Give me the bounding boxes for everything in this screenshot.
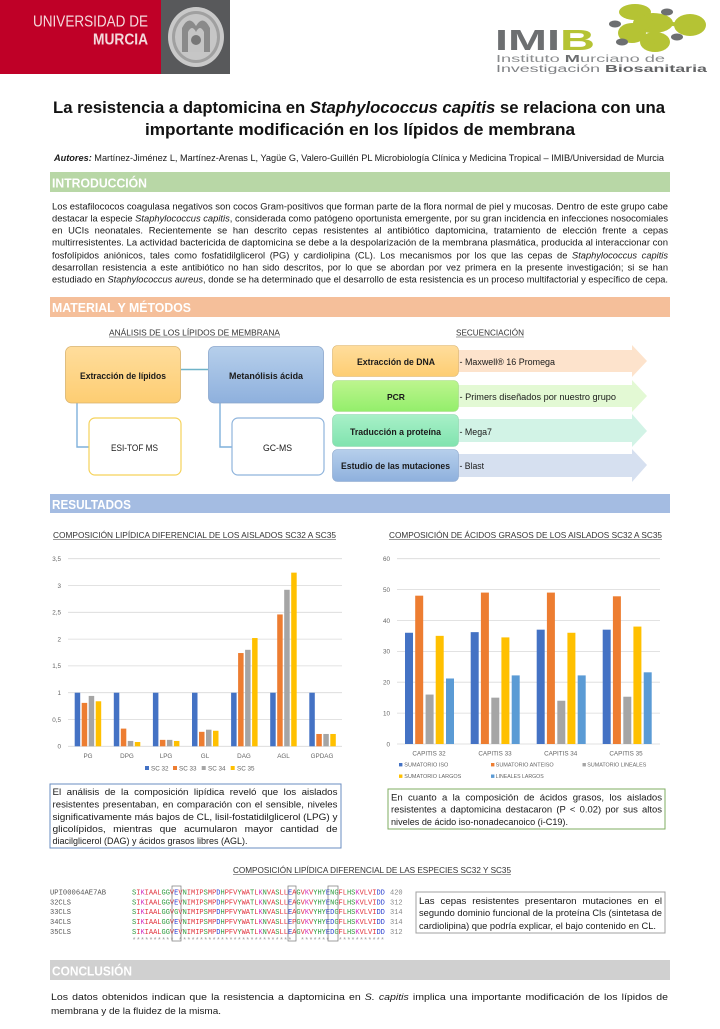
legend: SUMATORIO ISO — [404, 763, 448, 769]
heading: composición de ácidos grasos: COMPOSICIÓN DE ÁCIDOS GRASOS DE LOS AISLADOS SC32 A SC35 — [389, 530, 662, 540]
bar chart: composición de ácidos grasos: 60 — [383, 556, 390, 563]
bar chart: composición lipídica: PG — [83, 753, 93, 760]
callout: composición de ácidos grasos: niveles de ácido iso-nonadecanoico (i-C19). — [391, 817, 568, 827]
bar chart: composición lipídica: 0,5 — [52, 717, 61, 724]
sequence alignment: 312 — [390, 929, 403, 937]
callout: composición de ácidos grasos: En cuanto a la composición de ácidos grasos, los aislados — [391, 792, 663, 802]
step: extracción de DNA: Extracción de DNA — [357, 357, 435, 367]
text block: introducción: multirresistentes. La actividad bactericida de daptomicina se debe a la despolarización de la membrana plasmática, producida al interaccionar con — [52, 238, 668, 248]
bar chart: composición de ácidos grasos — [383, 556, 660, 780]
sequence alignment: 314 — [390, 909, 403, 917]
legend: SC 33 — [179, 765, 197, 772]
legend — [145, 765, 255, 772]
bar chart: composición lipídica: 0 — [57, 744, 61, 751]
callout: composición de ácidos grasos — [388, 789, 665, 829]
title — [53, 98, 666, 139]
text block: introducción: destacar la especie Staphylococcus capitis , considerada como patógeno oportunista emergente, por su gran incidencia en infecciones nosocomiales — [52, 214, 669, 224]
text block: conclusión: Los datos obtenidos indican que la resistencia a daptomicina en S. capitis implica una importante modificación de los lípidos de — [51, 992, 668, 1002]
bar chart: composición de ácidos grasos: CAPITIS 34 — [544, 750, 578, 758]
bar chart: composición lipídica: 3,5 — [52, 556, 61, 563]
sequence alignment: SIKIAALGGVEVNIMIPSMPDHPFVYWATLKNVASLLEPGVKVYHYEDGFLHSKVLVIDD — [132, 919, 385, 927]
legend: SUMATORIO LINEALES — [587, 763, 647, 769]
bar chart: composición lipídica: GPDAG — [311, 753, 333, 760]
callout: análisis de la composición lipídica: resistentes presentaban, en comparación con el sensible, niveles — [52, 800, 338, 810]
logo: IMIB: B — [560, 25, 595, 57]
text block: introducción — [52, 202, 669, 284]
title: La resistencia a daptomicina en Staphylococcus capitis se relaciona con una — [53, 98, 666, 117]
diagram: análisis de los lípidos de membrana: ANÁLISIS DE LOS LÍPIDOS DE MEMBRANA — [109, 328, 280, 338]
section heading: conclusión: CONCLUSIÓN — [52, 964, 132, 978]
bar chart: composición de ácidos grasos: 0 — [386, 741, 390, 748]
sequence alignment: 33CLS — [50, 909, 71, 917]
sequence alignment: 314 — [390, 919, 403, 927]
sequence alignment: 312 — [390, 900, 403, 908]
legend: SC 35 — [237, 765, 255, 772]
bar chart: composición de ácidos grasos: CAPITIS 32 — [412, 750, 446, 758]
callout: análisis de la composición lipídica: diacilglicerol (DAG) y ácidos grasos libres (AGL). — [52, 836, 248, 846]
callout: mutaciones: Las cepas resistentes presentaron mutaciones en el — [419, 896, 662, 906]
sequence alignment — [50, 886, 403, 946]
heading: composición lipídica de las especies: COMPOSICIÓN LIPÍDICA DIFERENCIAL DE LAS ESPECIES SC32 Y SC35 — [233, 865, 511, 875]
step: PCR: - Primers diseñados por nuestro grupo — [460, 392, 616, 402]
text block: conclusión — [51, 992, 668, 1016]
logo: IMIB — [495, 4, 708, 75]
sequence alignment: SIKIAALGGVEVNIMIPSMPDHPFVYWATLKNVASLLEAGVKVYHYENGFLHSKVLVIDD — [132, 900, 385, 908]
bar chart: composición lipídica: LPG — [160, 753, 172, 760]
bar chart: composición de ácidos grasos: 20 — [383, 680, 390, 686]
sequence alignment: SIKIAALGGVEVNIMIPSMPDHPFVYWATLKNVASLLEAGVKVYHYEDGFLHSKVLVIDD — [132, 929, 385, 937]
step: PCR: PCR — [387, 392, 405, 402]
logo: Universidad de Murcia: MURCIA — [93, 32, 148, 48]
bar chart: composición lipídica: 2,5 — [52, 610, 61, 617]
bar chart: composición lipídica: 3 — [57, 583, 61, 590]
callout: mutaciones — [416, 892, 665, 933]
bar chart: composición de ácidos grasos: CAPITIS 33 — [478, 750, 512, 758]
heading: composición lipídica: COMPOSICIÓN LIPÍDICA DIFERENCIAL DE LOS AISLADOS SC32 A SC35 — [53, 530, 336, 540]
bar chart: composición lipídica: DAG — [237, 753, 251, 760]
logo: IMIB: Investigación Biosanitaria — [496, 64, 708, 75]
step: traducción a proteína — [332, 414, 647, 447]
step: estudio de las mutaciones: - Blast — [460, 461, 484, 471]
callout: análisis de la composición lipídica: glicolípidos, mientras que acumularon mayor cantidad de — [52, 824, 338, 834]
text block: introducción: en UCIs neonatales. Recientemente se han descrito cepas resistentes al antibiótico daptomicina, tratamiento de elección frente a cepas — [52, 226, 669, 236]
step: extracción de DNA — [332, 345, 647, 377]
diagram: análisis de los lípidos de membrana: GC-MS — [263, 443, 292, 453]
section heading: conclusión — [50, 960, 670, 980]
diagram: análisis de los lípidos de membrana: ESI-TOF MS — [111, 443, 158, 453]
legend: SC 32 — [151, 765, 169, 772]
step: estudio de las mutaciones — [332, 449, 647, 482]
sequence alignment: 34CLS — [50, 919, 71, 927]
diagram: análisis de los lípidos de membrana: Metanólisis ácida — [229, 371, 304, 381]
callout: composición de ácidos grasos: resistentes a daptomicina destacaron (P < 0.02) por sus altos — [391, 804, 663, 814]
bar chart: composición lipídica: 1,5 — [52, 663, 61, 670]
bar chart: composición lipídica — [52, 556, 342, 772]
bar chart: composición de ácidos grasos: 50 — [383, 587, 390, 594]
logo: Universidad de Murcia — [0, 0, 230, 74]
diagram: secuenciación: SECUENCIACIÓN — [456, 328, 524, 338]
sequence alignment: UPI00064AE7AB — [50, 890, 106, 898]
legend — [399, 763, 647, 780]
bar chart: composición lipídica: GL — [201, 753, 210, 760]
logo: IMIB: IMI — [495, 25, 560, 57]
section heading: introducción — [50, 172, 670, 192]
bar chart: composición de ácidos grasos: 10 — [383, 710, 390, 717]
bar chart: composición lipídica: 2 — [57, 636, 61, 643]
legend: SUMATORIO ANTEISO — [496, 763, 554, 769]
text block: introducción: fosfolípidos aniónicos, tales como fosfatidilglicerol (PG) y cardiolipina (CL). Los mecanismos por los que las cepas de Staphylococcus capitis — [52, 250, 669, 260]
section heading: resultados — [50, 494, 670, 513]
callout: análisis de la composición lipídica: El análisis de la composición lipídica reveló que los aislados — [52, 787, 338, 797]
diagram: análisis de los lípidos de membrana: Extracción de lípidos — [80, 371, 166, 381]
title: importante modificación en los lípidos de membrana — [145, 120, 576, 139]
callout: análisis de la composición lipídica: significativamente más bajos de CL, lisil-fostatidilglicerol (LPG) y — [52, 812, 338, 822]
step: traducción a proteína: - Mega7 — [460, 427, 492, 437]
text block: introducción: Los estafilococos coagulasa negativos son cocos Gram-positivos que forman parte de la flora normal de piel y mucosas. Dentro de este grupo cabe — [52, 202, 668, 212]
sequence alignment: ********** *************************** ******* *********** — [132, 938, 385, 946]
sequence alignment: 35CLS — [50, 929, 71, 937]
sequence alignment: 32CLS — [50, 900, 71, 908]
logo: Universidad de Murcia: UNIVERSIDAD DE — [33, 14, 148, 30]
bar chart: composición lipídica: AGL — [277, 753, 290, 760]
callout: mutaciones: segundo dominio funcional de la proteína Cls (sintetasa de — [419, 908, 662, 918]
diagram: análisis de los lípidos de membrana — [66, 328, 324, 475]
sequence alignment: SIKIAALGGVGVNIMIPSMPDHPFVYWATLKNVASLLEAGVKVYHYEDGFLHSKVLVIDD — [132, 909, 385, 917]
legend: SUMATORIO LARGOS — [404, 774, 462, 780]
legend: LINEALES LARGOS — [496, 774, 544, 780]
authors: Autores: Martínez-Jiménez L, Martínez-Arenas L, Yagüe G, Valero-Guillén PL Microbiología Clínica y Medicina Tropical – IMIB/Universidad de Murcia — [53, 153, 664, 163]
step: estudio de las mutaciones: Estudio de las mutaciones — [341, 461, 450, 471]
bar chart: composición lipídica: DPG — [120, 753, 134, 760]
text block: conclusión: membrana y de la fluidez de la misma. — [51, 1006, 221, 1016]
callout: mutaciones: cardiolipina) que podría explicar, el bajo contenido en CL. — [419, 921, 656, 931]
diagram: secuenciación — [332, 328, 647, 482]
bar chart: composición de ácidos grasos: CAPITIS 35 — [609, 750, 643, 758]
logo: IMIB: Instituto M urciano de — [496, 54, 666, 65]
step: PCR — [332, 380, 647, 412]
section heading: material y métodos: MATERIAL Y MÉTODOS — [52, 300, 191, 315]
step: extracción de DNA: - Maxwell® 16 Promega — [460, 357, 555, 367]
section heading: resultados: RESULTADOS — [52, 498, 131, 512]
callout: análisis de la composición lipídica — [50, 784, 341, 848]
text block: introducción: estudiado en Staphylococcus aureus , donde se ha determinado que el desarrollo de esta resistencia es un proceso multifactorial y específico de cepa. — [52, 274, 668, 284]
section heading: material y métodos — [50, 297, 670, 317]
sequence alignment: SIKIAALGGVEVNIMIPSMPDHPFVYWATLKNVASLLEAGVKVYHYENGFLHSKVLVIDD — [132, 890, 385, 898]
section heading: introducción: INTRODUCCIÓN — [52, 176, 147, 190]
bar chart: composición de ácidos grasos: 30 — [383, 649, 390, 656]
bar chart: composición lipídica: 1 — [57, 690, 61, 697]
text block: introducción: desarrollan resistencia a este antibiótico no han sido descritos, por lo que se abordan por vez primera en la presente investigación; si se han — [52, 262, 668, 272]
step: traducción a proteína: Traducción a proteína — [350, 427, 442, 437]
bar chart: composición de ácidos grasos: 40 — [383, 618, 390, 625]
sequence alignment: 420 — [390, 890, 403, 898]
legend: SC 34 — [208, 765, 226, 772]
